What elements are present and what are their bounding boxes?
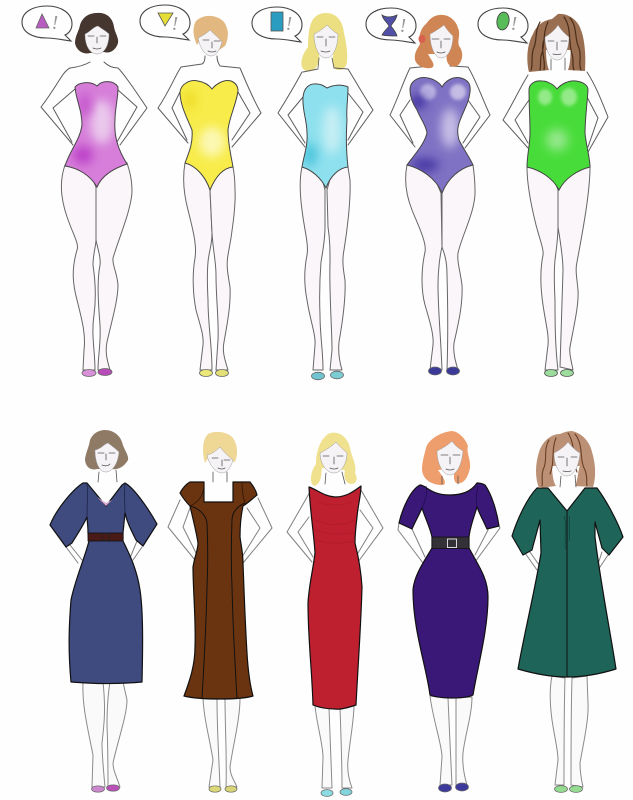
figure: rectangle body in cyan swimsuit — [252, 7, 373, 380]
hair and face — [301, 13, 348, 72]
belt — [88, 533, 123, 541]
legs — [406, 155, 475, 370]
speech bubble: hourglass: ! — [400, 15, 406, 37]
legs — [61, 150, 132, 370]
figure: triangle body in navy dress — [50, 430, 157, 792]
figure: rectangle body in red dress — [287, 433, 383, 796]
legs — [83, 682, 127, 787]
hair and face — [193, 16, 228, 56]
speech bubble: triangle — [22, 6, 72, 41]
speech bubble: oval — [478, 8, 528, 43]
arms — [503, 72, 608, 152]
shoes — [312, 371, 344, 380]
legs — [315, 705, 354, 788]
legs — [300, 150, 350, 370]
hair and face — [85, 430, 128, 482]
speech bubble: rectangle: ! — [286, 13, 292, 35]
speech bubble: oval: ! — [511, 13, 517, 35]
hair and face — [415, 15, 462, 68]
hair and face — [422, 431, 470, 485]
arms — [168, 498, 272, 563]
shoes — [554, 786, 582, 792]
legs — [550, 676, 588, 787]
arms — [390, 66, 490, 148]
arms — [41, 62, 147, 145]
shoes — [92, 785, 120, 792]
figure: triangle body in magenta swimsuit — [22, 6, 147, 376]
speech bubble: triangle: ! — [52, 12, 58, 34]
hair and face — [311, 433, 357, 486]
shoes — [321, 789, 352, 796]
figure: hourglass body in purple dress — [398, 431, 500, 792]
shoes — [82, 368, 112, 376]
swimsuit — [180, 81, 238, 190]
figure: oval body in green dress — [512, 431, 623, 792]
shoes — [428, 367, 460, 375]
swimsuit — [407, 77, 473, 193]
green dress — [512, 488, 623, 677]
arms — [158, 56, 261, 147]
hair and face — [75, 13, 118, 54]
belt — [432, 537, 469, 548]
arms — [278, 69, 373, 147]
figure: inverted triangle body in brown dress — [168, 432, 272, 792]
red dress — [308, 486, 362, 709]
navy dress — [50, 483, 157, 684]
brown dress — [180, 482, 257, 699]
figure: oval body in green swimsuit — [478, 8, 608, 376]
speech bubble: hourglass — [366, 8, 416, 43]
legs — [430, 696, 472, 785]
speech bubble: rectangle — [252, 7, 302, 42]
shoes — [544, 370, 574, 376]
hands — [525, 552, 608, 570]
shoes — [200, 370, 228, 376]
figure: hourglass body in purple swimsuit — [366, 8, 490, 375]
legs — [203, 698, 240, 787]
speech bubble: inverted triangle — [140, 5, 190, 40]
legs — [184, 150, 235, 370]
hair and face — [527, 14, 585, 72]
hair and face — [536, 431, 595, 488]
arms — [398, 523, 500, 563]
swimsuit — [302, 84, 348, 188]
hair and face — [203, 432, 237, 482]
swimsuit — [527, 81, 590, 190]
figure: inverted triangle body in yellow swimsuit — [140, 5, 261, 376]
purple dress — [399, 483, 499, 698]
shoes — [438, 783, 468, 792]
speech bubble: inverted triangle: ! — [172, 13, 178, 35]
arms — [287, 490, 383, 562]
legs — [527, 150, 590, 370]
shoes — [209, 786, 237, 792]
hands — [66, 541, 142, 563]
swimsuit — [65, 82, 127, 187]
